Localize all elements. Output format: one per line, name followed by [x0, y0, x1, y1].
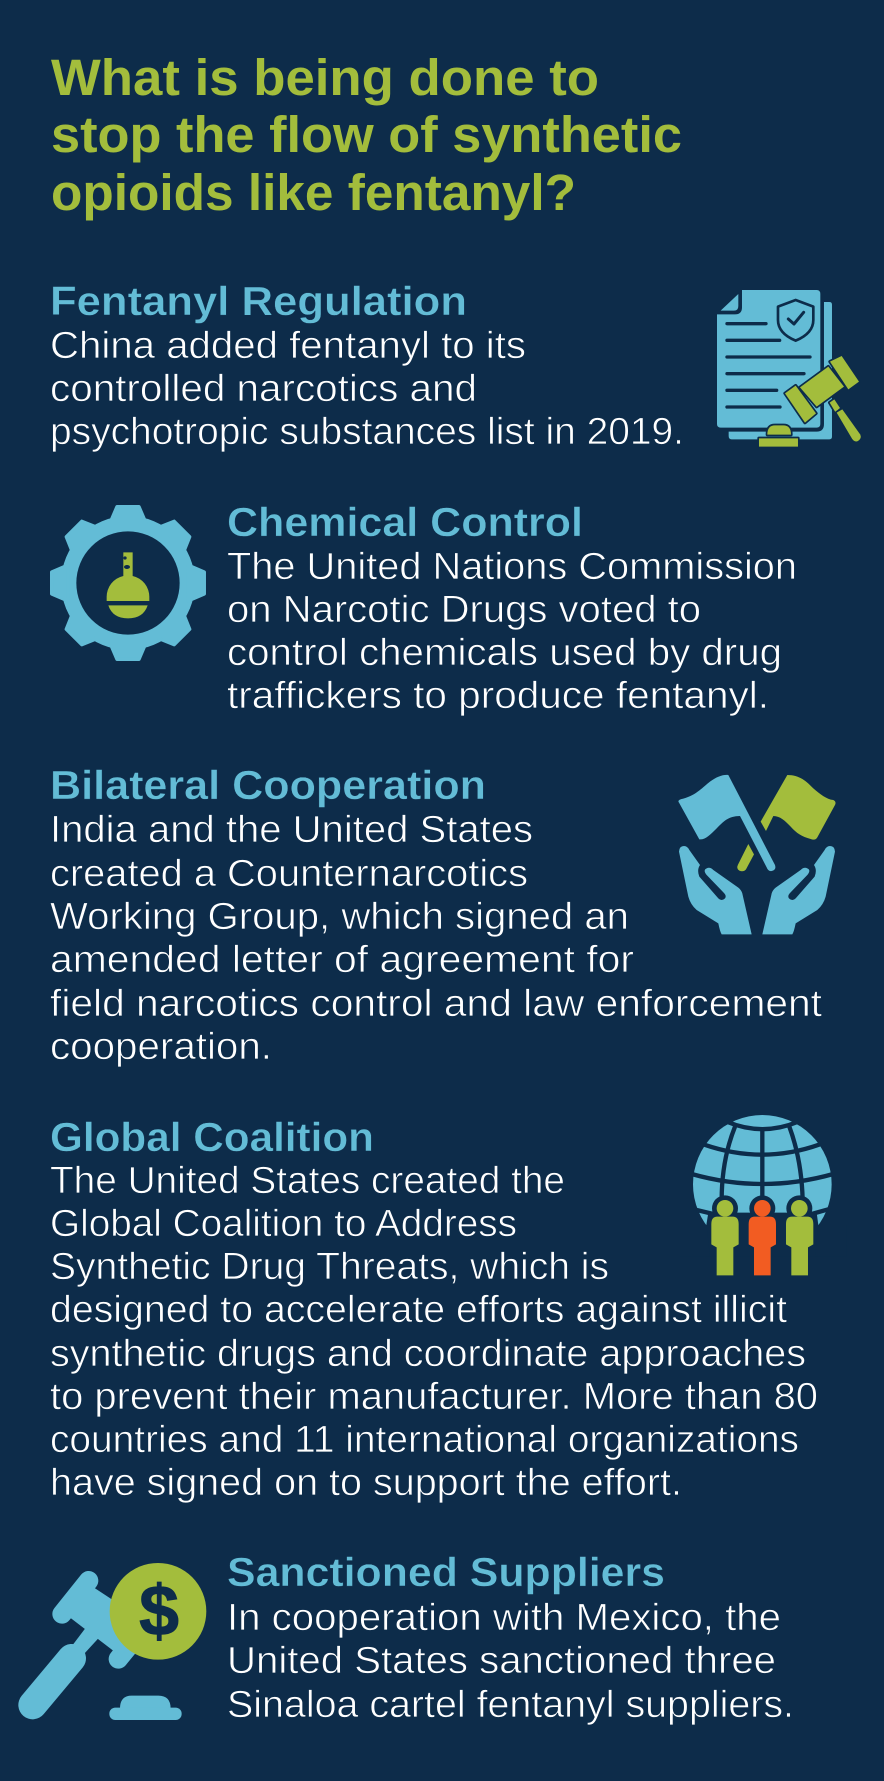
- text block: chemical control: traffickers to produce fentanyl.: [227, 675, 769, 717]
- text block: chemical control: control chemicals used by drug: [227, 632, 782, 674]
- text block: global coalition: Synthetic Drug Threats, which is: [50, 1246, 609, 1288]
- text block: global coalition: [50, 1160, 818, 1504]
- text block: bilateral cooperation: [50, 809, 822, 1068]
- text block: bilateral cooperation: cooperation.: [50, 1026, 272, 1068]
- text block: global coalition: countries and 11 international organizations: [50, 1419, 799, 1461]
- heading: bilateral cooperation: Bilateral Cooperation: [50, 762, 486, 808]
- icon: flags and hands: [678, 775, 836, 934]
- text block: sanctioned suppliers: [227, 1597, 794, 1726]
- icon: document with shield and gavel: [717, 290, 861, 447]
- panel: fentanyl regulation: [50, 278, 861, 453]
- text block: bilateral cooperation: Working Group, which signed an: [50, 896, 629, 938]
- title: stop the flow of synthetic: [51, 106, 682, 163]
- panel: chemical control: [52, 499, 797, 717]
- text block: global coalition: designed to accelerate efforts against illicit: [50, 1289, 787, 1331]
- icon: gavel and dollar coin: [33, 1563, 206, 1720]
- text block: fentanyl regulation: psychotropic substances list in 2019.: [50, 411, 684, 453]
- panel: global coalition: [50, 1114, 847, 1504]
- title: What is being done to: [51, 49, 599, 106]
- text block: bilateral cooperation: created a Counternarcotics: [50, 853, 528, 895]
- heading: fentanyl regulation: Fentanyl Regulation: [50, 278, 467, 324]
- text block: sanctioned suppliers: United States sanctioned three: [227, 1640, 776, 1682]
- heading: sanctioned suppliers: Sanctioned Suppliers: [227, 1549, 665, 1595]
- text block: chemical control: [227, 546, 797, 717]
- icon: globe and people: [680, 1115, 847, 1275]
- text block: bilateral cooperation: field narcotics control and law enforcement: [50, 983, 822, 1025]
- text block: sanctioned suppliers: Sinaloa cartel fentanyl suppliers.: [227, 1684, 794, 1726]
- text block: chemical control: on Narcotic Drugs voted to: [227, 589, 701, 631]
- title: opioids like fentanyl?: [51, 164, 576, 221]
- text block: bilateral cooperation: India and the United States: [50, 809, 533, 851]
- icon: gavel and dollar coin: $: [139, 1571, 179, 1651]
- text block: chemical control: The United Nations Commission: [227, 546, 797, 588]
- text block: fentanyl regulation: controlled narcotics and: [50, 368, 477, 410]
- title: [51, 49, 682, 221]
- text block: global coalition: The United States created the: [50, 1160, 565, 1202]
- heading: chemical control: Chemical Control: [227, 499, 583, 545]
- icon: gear with flask: [52, 507, 204, 659]
- text block: sanctioned suppliers: In cooperation with Mexico, the: [227, 1597, 781, 1639]
- text block: bilateral cooperation: amended letter of agreement for: [50, 939, 634, 981]
- heading: global coalition: Global Coalition: [50, 1114, 374, 1160]
- text block: fentanyl regulation: [50, 325, 684, 453]
- text block: global coalition: synthetic drugs and coordinate approaches: [50, 1333, 806, 1375]
- text block: global coalition: Global Coalition to Address: [50, 1203, 517, 1245]
- panel: sanctioned suppliers: [33, 1549, 794, 1726]
- text block: global coalition: to prevent their manufacturer. More than 80: [50, 1376, 818, 1418]
- text block: fentanyl regulation: China added fentanyl to its: [50, 325, 526, 367]
- text block: global coalition: have signed on to support the effort.: [50, 1462, 682, 1504]
- panel: bilateral cooperation: [50, 762, 836, 1068]
